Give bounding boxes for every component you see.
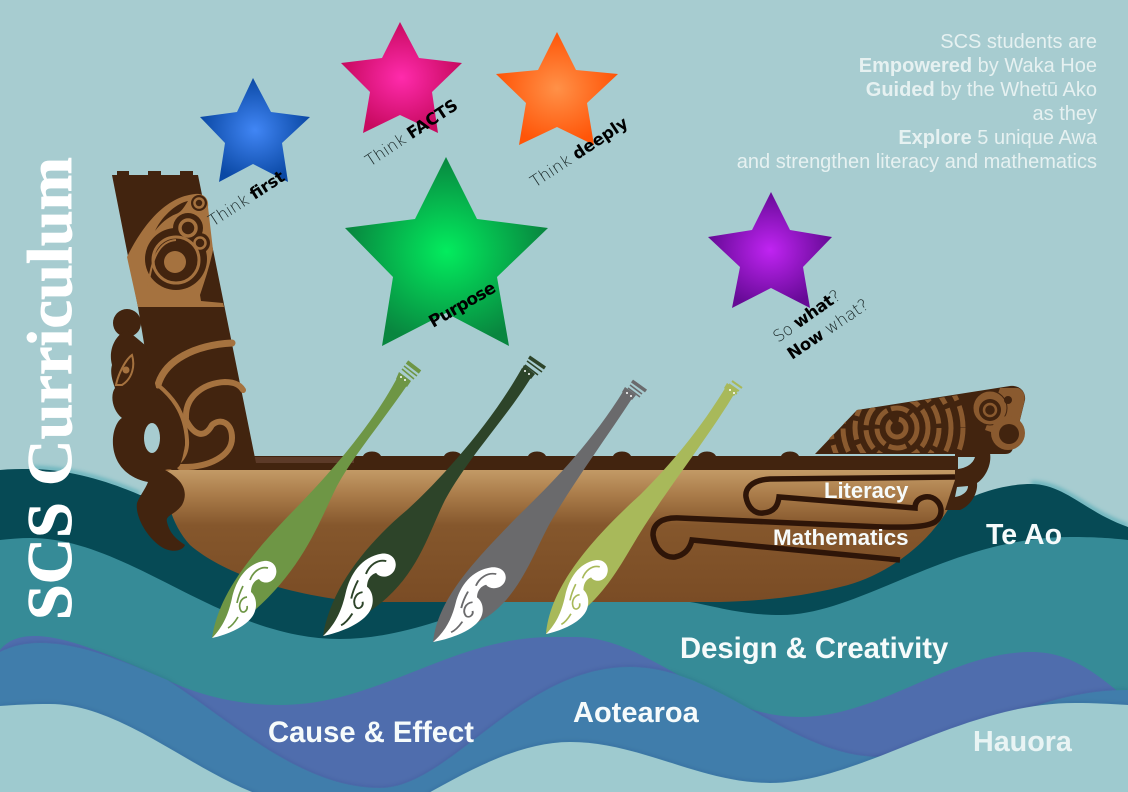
stern hook: [945, 453, 990, 510]
paddle: grey: [433, 381, 646, 642]
wave: Aotearoa: [0, 643, 1128, 792]
label: Think first: Think first: [205, 167, 288, 230]
label: Cause & Effect: Cause & Effect: [268, 717, 474, 749]
label: Literacy: Literacy: [824, 478, 909, 503]
wave: Hauora: [0, 703, 1128, 792]
label: Mathematics: Mathematics: [773, 525, 909, 550]
label: Purpose: Purpose: [426, 278, 500, 332]
intro text: and strengthen literacy and mathematics: [737, 151, 1097, 173]
star: purple: [708, 192, 832, 308]
stern carving: [815, 386, 1026, 454]
wave: Design & Creativity: [0, 537, 1128, 792]
label: Think FACTS: Think FACTS: [362, 95, 461, 170]
star: pink: [341, 22, 462, 133]
title: SCS Curriculum: [14, 157, 85, 620]
paddle: olive: [546, 381, 742, 634]
intro text: Guided by the Whetū Ako: [866, 79, 1097, 101]
intro text: as they: [1033, 103, 1097, 125]
intro text: [737, 31, 1098, 173]
intro text: Explore 5 unique Awa: [898, 127, 1098, 149]
label: So what?: So what?: [769, 286, 844, 346]
paddle: dark green: [323, 357, 545, 636]
waka hull and carvings: [111, 171, 1025, 602]
gunwale: [250, 452, 958, 470]
intro text: SCS students are: [940, 31, 1097, 53]
wave: Cause & Effect: [0, 636, 1128, 792]
hull line pattern: [653, 477, 955, 560]
intro text: Empowered by Waka Hoe: [859, 55, 1097, 77]
label: Now what?: Now what?: [784, 295, 872, 363]
wave glow edge: [30, 468, 1128, 526]
label: Te Ao: Te Ao: [986, 519, 1062, 551]
wave: Te Ao: [0, 469, 1128, 792]
label: Aotearoa: Aotearoa: [573, 697, 700, 729]
paddle: green: [212, 362, 420, 638]
label: Think deeply: Think deeply: [527, 113, 632, 191]
carved figure: [111, 309, 185, 551]
star: orange: [496, 32, 618, 145]
star: green: [345, 157, 548, 346]
star: blue: [200, 78, 310, 182]
label: Design & Creativity: Design & Creativity: [680, 633, 949, 665]
prow post: [112, 171, 256, 470]
label: Hauora: Hauora: [973, 726, 1073, 758]
hull: [165, 470, 958, 602]
